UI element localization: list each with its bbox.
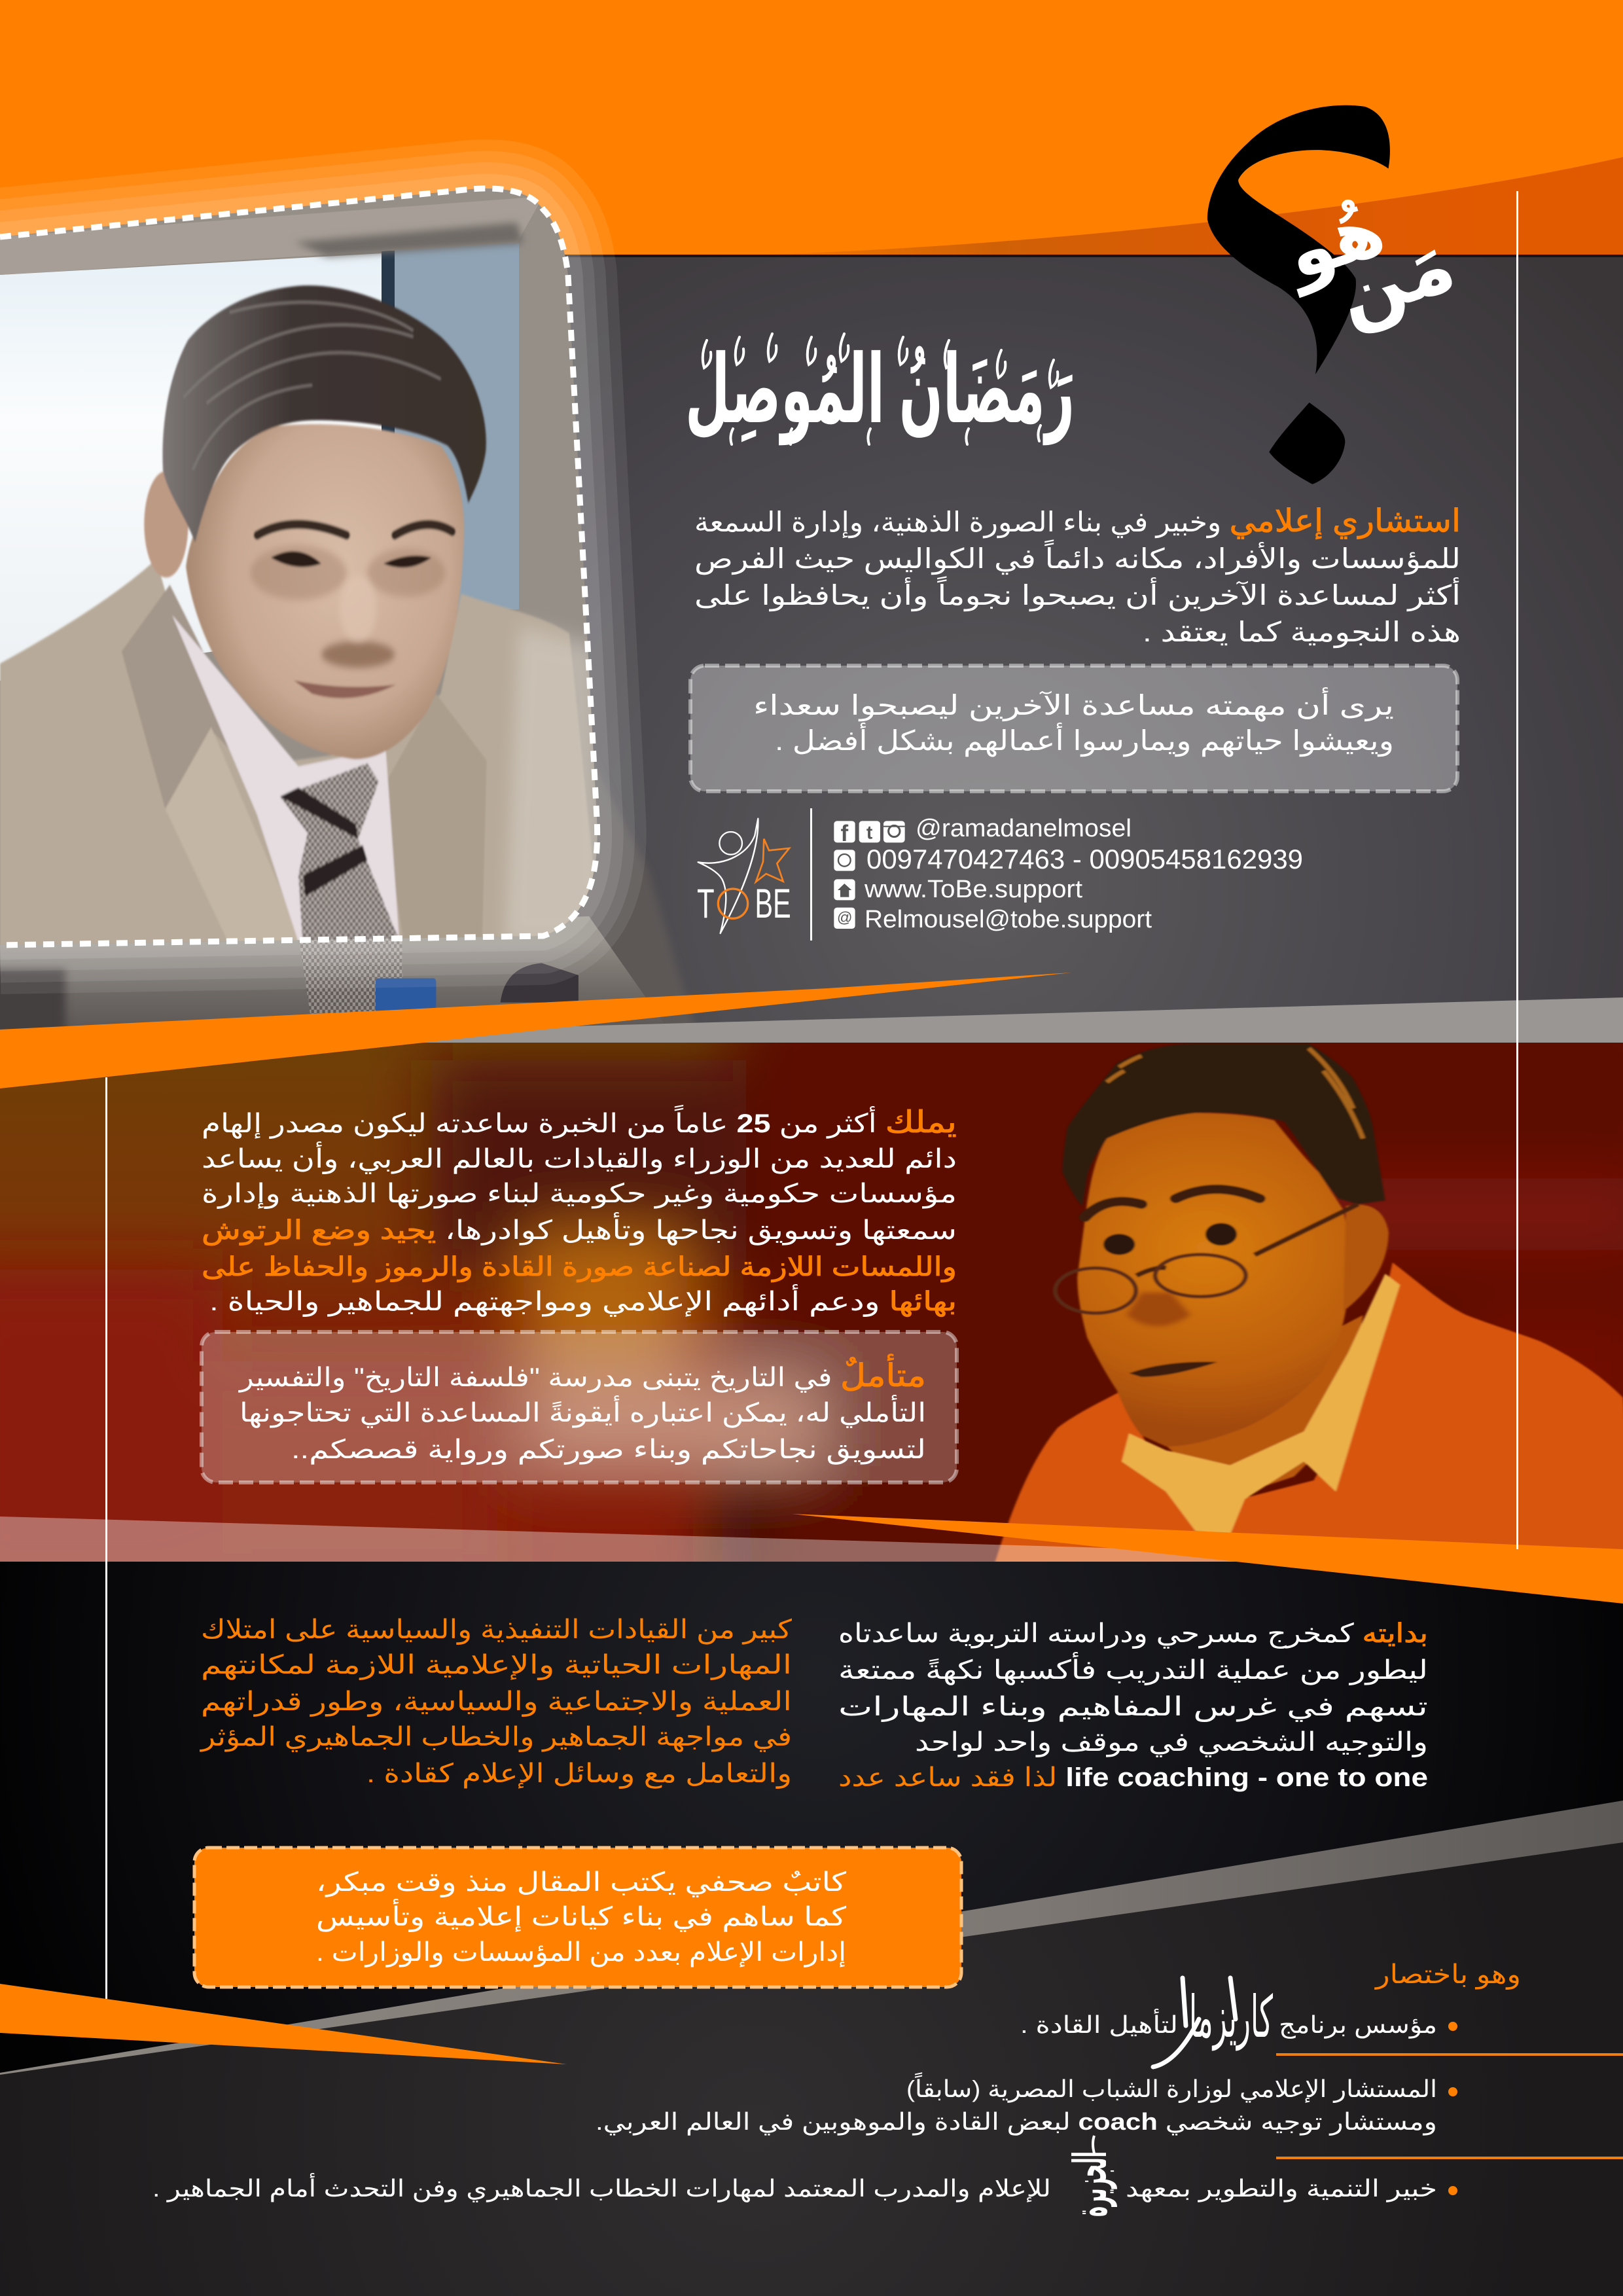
- text block: experience paragraph: [202, 1104, 957, 1317]
- callout: mission box: يرى أن مهمته مساعدة الآخرين ليصبحوا سعداء: [753, 687, 1394, 722]
- nose: [1126, 1293, 1190, 1326]
- top orange header: [0, 0, 1623, 262]
- suit left lapel: [122, 584, 227, 808]
- accent: orange wedge section 2 bottom: [792, 1514, 1623, 1604]
- vertical rule left: [105, 1077, 107, 1999]
- divider: [1276, 2053, 1623, 2056]
- callout: contemplative box: متأملٌ في التاريخ يتبنى مدرسة "فلسفة التاريخ" والتفسير: [238, 1354, 926, 1393]
- icon: instagram: [883, 821, 905, 842]
- text block: intro paragraph: [694, 504, 1461, 648]
- contact icons: [834, 821, 905, 929]
- icon: twitter: t: [866, 823, 873, 844]
- mouth: [294, 681, 396, 698]
- text block: leaders skills: المهارات الحياتية والإعلامية اللازمة لمكانتهم: [201, 1651, 792, 1680]
- text block: director background: ليطور من عملية التدريب فأكسبها نكهةً ممتعة: [838, 1652, 1428, 1685]
- contact details: [864, 815, 1303, 933]
- logo: ToBe: [697, 819, 791, 933]
- heading: من هو: هُو: [1274, 187, 1395, 298]
- ear: [1344, 1205, 1389, 1311]
- text block: experience paragraph: واللمسات اللازمة لصناعة صورة القادة والرموز والحفاظ على: [202, 1253, 957, 1282]
- icon: email: @: [836, 908, 852, 925]
- tie: [280, 763, 404, 948]
- title: رمضان الموصل calligraphy: [685, 334, 1075, 445]
- heading: in brief: وهو باختصار: [1374, 1960, 1521, 1990]
- bullet 2: ومستشار توجيه شخصي coach لبعض القادة والموهوبين في العالم العربي.: [596, 2108, 1437, 2136]
- logo: Charisma: [1153, 1978, 1273, 2067]
- bullet 1: لتأهيل القادة .: [1020, 2009, 1178, 2038]
- photo: portrait of the consultant in frame: [0, 183, 609, 949]
- eye sockets: [250, 545, 347, 600]
- bullet 3: [152, 2173, 1457, 2202]
- bullet 3: للإعلام والمدرب المعتمد لمهارات الخطاب الجماهيري وفن التحدث أمام الجماهير .: [152, 2173, 1051, 2202]
- text block: director background: تسهم في غرس المفاهيم وبناء المهارات: [838, 1693, 1428, 1722]
- icon: whatsapp: [834, 850, 855, 871]
- divider: [1276, 2157, 1623, 2159]
- logo: Charisma: كاريزما: [1189, 1985, 1273, 2051]
- sweater: [993, 1263, 1623, 1571]
- divider: [810, 808, 812, 941]
- brows: [1084, 1189, 1260, 1217]
- mouth: [1129, 1362, 1218, 1377]
- text block: experience paragraph: سمعتها وتسويق نجاحها وتأهيل كوادرها، يجيد وضع الرتوش: [202, 1212, 957, 1246]
- face: [1077, 1113, 1349, 1446]
- eyes: [1103, 1234, 1135, 1255]
- callout: orange journalist box: كاتبٌ صحفي يكتب المقال منذ وقت مبكر،: [316, 1868, 847, 1897]
- text block: experience paragraph: دائم للعديد من الوزراء والقيادات بالعالم العربي، وأن يساعد: [202, 1141, 957, 1174]
- heading: من هو: مَن: [1327, 220, 1465, 340]
- contact details: 0097470427463 - 00905458162939: [866, 844, 1303, 874]
- bullet 1: مؤسس برنامج: [1279, 2011, 1437, 2039]
- contact details: @ramadanelmosel: [916, 815, 1132, 842]
- text block: experience paragraph: بهائها ودعم أدائهم الإعلامي ومواجهتهم للجماهير والحياة .: [209, 1284, 957, 1317]
- icon: facebook: f: [840, 821, 848, 846]
- accent band: grey wedge: [419, 997, 1623, 1043]
- text block: intro paragraph: أكثر لمساعدة الآخرين أن يصبحوا نجوماً وأن يحافظوا على: [694, 576, 1461, 611]
- icon: calligraphic question mark: [1207, 105, 1390, 484]
- hair: [163, 285, 486, 543]
- callout: orange journalist box: كما ساهم في بناء كيانات إعلامية وتأسيس: [316, 1899, 847, 1932]
- text block: experience paragraph: مؤسسات حكومية وغير حكومية لبناء صورتها الذهنية وإدارة: [202, 1179, 957, 1209]
- bullet 2: المستشار الإعلامي لوزارة الشباب المصرية (سابقاً): [906, 2072, 1437, 2103]
- photo: second portrait in orange tone: [993, 1044, 1623, 1571]
- icon: twitter: [859, 821, 880, 844]
- shirt: [172, 615, 399, 942]
- callout: orange journalist box: [194, 1848, 961, 1987]
- text block: experience paragraph: يملك أكثر من 25 عاماً من الخبرة ساعدته ليكون مصدر إلهام: [202, 1104, 957, 1139]
- photo frame glow: [0, 188, 597, 945]
- callout: orange journalist box: إدارات الإعلام بعدد من المؤسسات والوزارات .: [316, 1938, 846, 1967]
- title: رمضان الموصل calligraphy: رَمَضَانُ المُوصِل: [685, 336, 1075, 445]
- text block: leaders skills: في مواجهة الجماهير والخطاب الجماهيري المؤثر: [200, 1723, 792, 1752]
- bullet 1: [1020, 2009, 1457, 2039]
- text block: leaders skills: كبير من القيادات التنفيذية والسياسية على امتلاك: [201, 1615, 793, 1645]
- heading: من هو: [1274, 187, 1465, 340]
- photo frame dashed outline: [0, 188, 597, 945]
- suit right fade: [505, 627, 606, 945]
- text block: intro paragraph: هذه النجومية كما يعتقد .: [1143, 617, 1461, 648]
- icon: home: [834, 879, 855, 900]
- panel: dark grey intro background: [0, 257, 1623, 1043]
- callout: contemplative box: [202, 1332, 957, 1482]
- photo: lower suit fading below frame: [0, 753, 697, 1054]
- accent: grey diagonal band: [0, 1801, 1623, 2075]
- callout: mission box: [690, 666, 1457, 791]
- text block: intro paragraph: للمؤسسات والأفراد، مكانه دائماً في الكواليس حيث الفرص: [694, 539, 1461, 575]
- text block: leaders skills: والتعامل مع وسائل الإعلام كقادة .: [366, 1759, 792, 1789]
- logo: ToBe: BE: [755, 881, 791, 927]
- icon: email: [834, 908, 855, 929]
- panel: section 2 blurred theatre background: [0, 982, 1623, 1636]
- accent: orange wedge top left: [0, 973, 1071, 1088]
- logo: ToBe: T: [697, 881, 715, 927]
- collar: [1122, 1274, 1400, 1535]
- icon: facebook: [834, 821, 855, 846]
- logo: Al Jazeera: [1065, 2136, 1117, 2217]
- text block: leaders skills: العملية والاجتماعية والسياسية، وطور قدراتهم: [201, 1687, 792, 1717]
- accent: translucent light wedge at base of section 2: [0, 1516, 1623, 1563]
- text block: leaders skills: [200, 1615, 793, 1789]
- brows: [257, 524, 452, 535]
- bullet 2: [596, 2072, 1457, 2136]
- contact details: Relmousel@tobe.support: [865, 906, 1152, 933]
- suit jacket: [0, 560, 601, 948]
- vertical rule right: [1516, 191, 1518, 1549]
- callout: contemplative box: التأملي له، يمكن اعتباره أيقونةً المساعدة التي تحتاجونها: [240, 1395, 926, 1428]
- ear: [144, 471, 188, 577]
- contact details: www.ToBe.support: [864, 876, 1082, 903]
- list: achievements: الجزيرة: [1065, 2151, 1117, 2217]
- text block: intro paragraph: استشاري إعلامي وخبير في بناء الصورة الذهنية، وإدارة السمعة: [694, 504, 1461, 539]
- eyes: [271, 551, 431, 567]
- neck shading: [1147, 1315, 1363, 1499]
- callout: mission box: ويعيشوا حياتهم ويمارسوا أعمالهم بشكل أفضل .: [775, 723, 1394, 757]
- panel: lower dark section: [0, 1562, 1623, 2296]
- text block: director background: life coaching - one to one لذا فقد ساعد عدد: [838, 1763, 1428, 1792]
- hair: [1063, 1044, 1385, 1206]
- text block: director background: بدايته كمخرج مسرحي ودراسته التربوية ساعدتاه: [838, 1619, 1428, 1649]
- face: [186, 424, 464, 759]
- nose shading: [321, 641, 395, 668]
- accent: orange wedge bottom left: [0, 1984, 567, 2064]
- list: achievements: [152, 1978, 1623, 2217]
- callout: contemplative box: لتسويق نجاحاتكم وبناء صورتكم ورواية قصصكم..: [291, 1435, 926, 1465]
- text block: director background: [838, 1619, 1428, 1792]
- bullet 3: خبير التنمية والتطوير بمعهد: [1126, 2175, 1437, 2202]
- glasses: [1137, 1204, 1358, 1276]
- text block: director background: والتوجيه الشخصي في موقف واحد لواحد: [915, 1728, 1428, 1757]
